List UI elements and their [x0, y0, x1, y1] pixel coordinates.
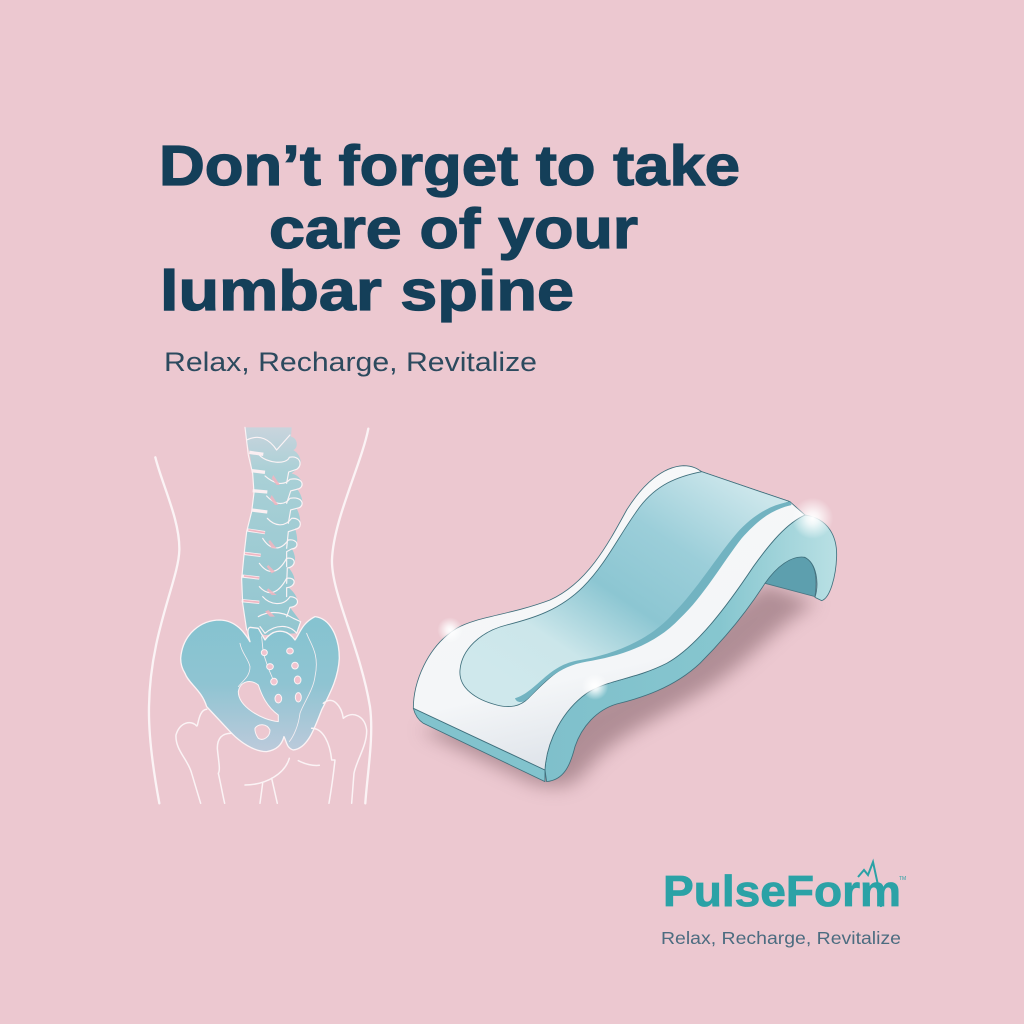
cushion shadow	[420, 583, 817, 787]
side wall	[545, 515, 837, 782]
title: lumbar spine	[160, 259, 574, 323]
pelvis inner lines	[238, 633, 316, 742]
sparkle: middle edge	[582, 673, 608, 700]
underside arch	[765, 557, 816, 597]
title: Don’t forget to take	[159, 134, 740, 198]
body outline	[149, 429, 371, 803]
posterior elements	[242, 427, 302, 633]
illustration: curved lumbar cushion	[413, 466, 837, 787]
subtitle: Relax, Recharge, Revitalize	[164, 347, 537, 377]
front lip	[413, 708, 545, 782]
disc slivers	[265, 475, 280, 617]
logo pulse line	[858, 862, 881, 907]
title	[159, 134, 740, 323]
column base	[242, 427, 302, 635]
sacral foramina	[261, 648, 301, 703]
pelvic openings	[238, 682, 278, 739]
teal pad	[460, 472, 790, 707]
white top surface	[413, 466, 805, 770]
logo wordmark: PulseForm	[663, 867, 901, 916]
pelvis	[181, 617, 339, 752]
title: care of your	[269, 197, 638, 261]
illustration: lumbar spine and pelvis	[149, 427, 371, 803]
sparkle: right corner	[792, 498, 833, 539]
sparkle: left corner	[437, 617, 463, 643]
vertebral column	[241, 427, 302, 635]
discs	[241, 452, 267, 602]
logo: PulseForm	[663, 862, 906, 916]
pad groove	[515, 502, 792, 702]
tagline: Relax, Recharge, Revitalize	[661, 928, 901, 948]
trademark mark: TM	[899, 876, 906, 882]
femurs and lower pelvis lines	[176, 700, 367, 803]
